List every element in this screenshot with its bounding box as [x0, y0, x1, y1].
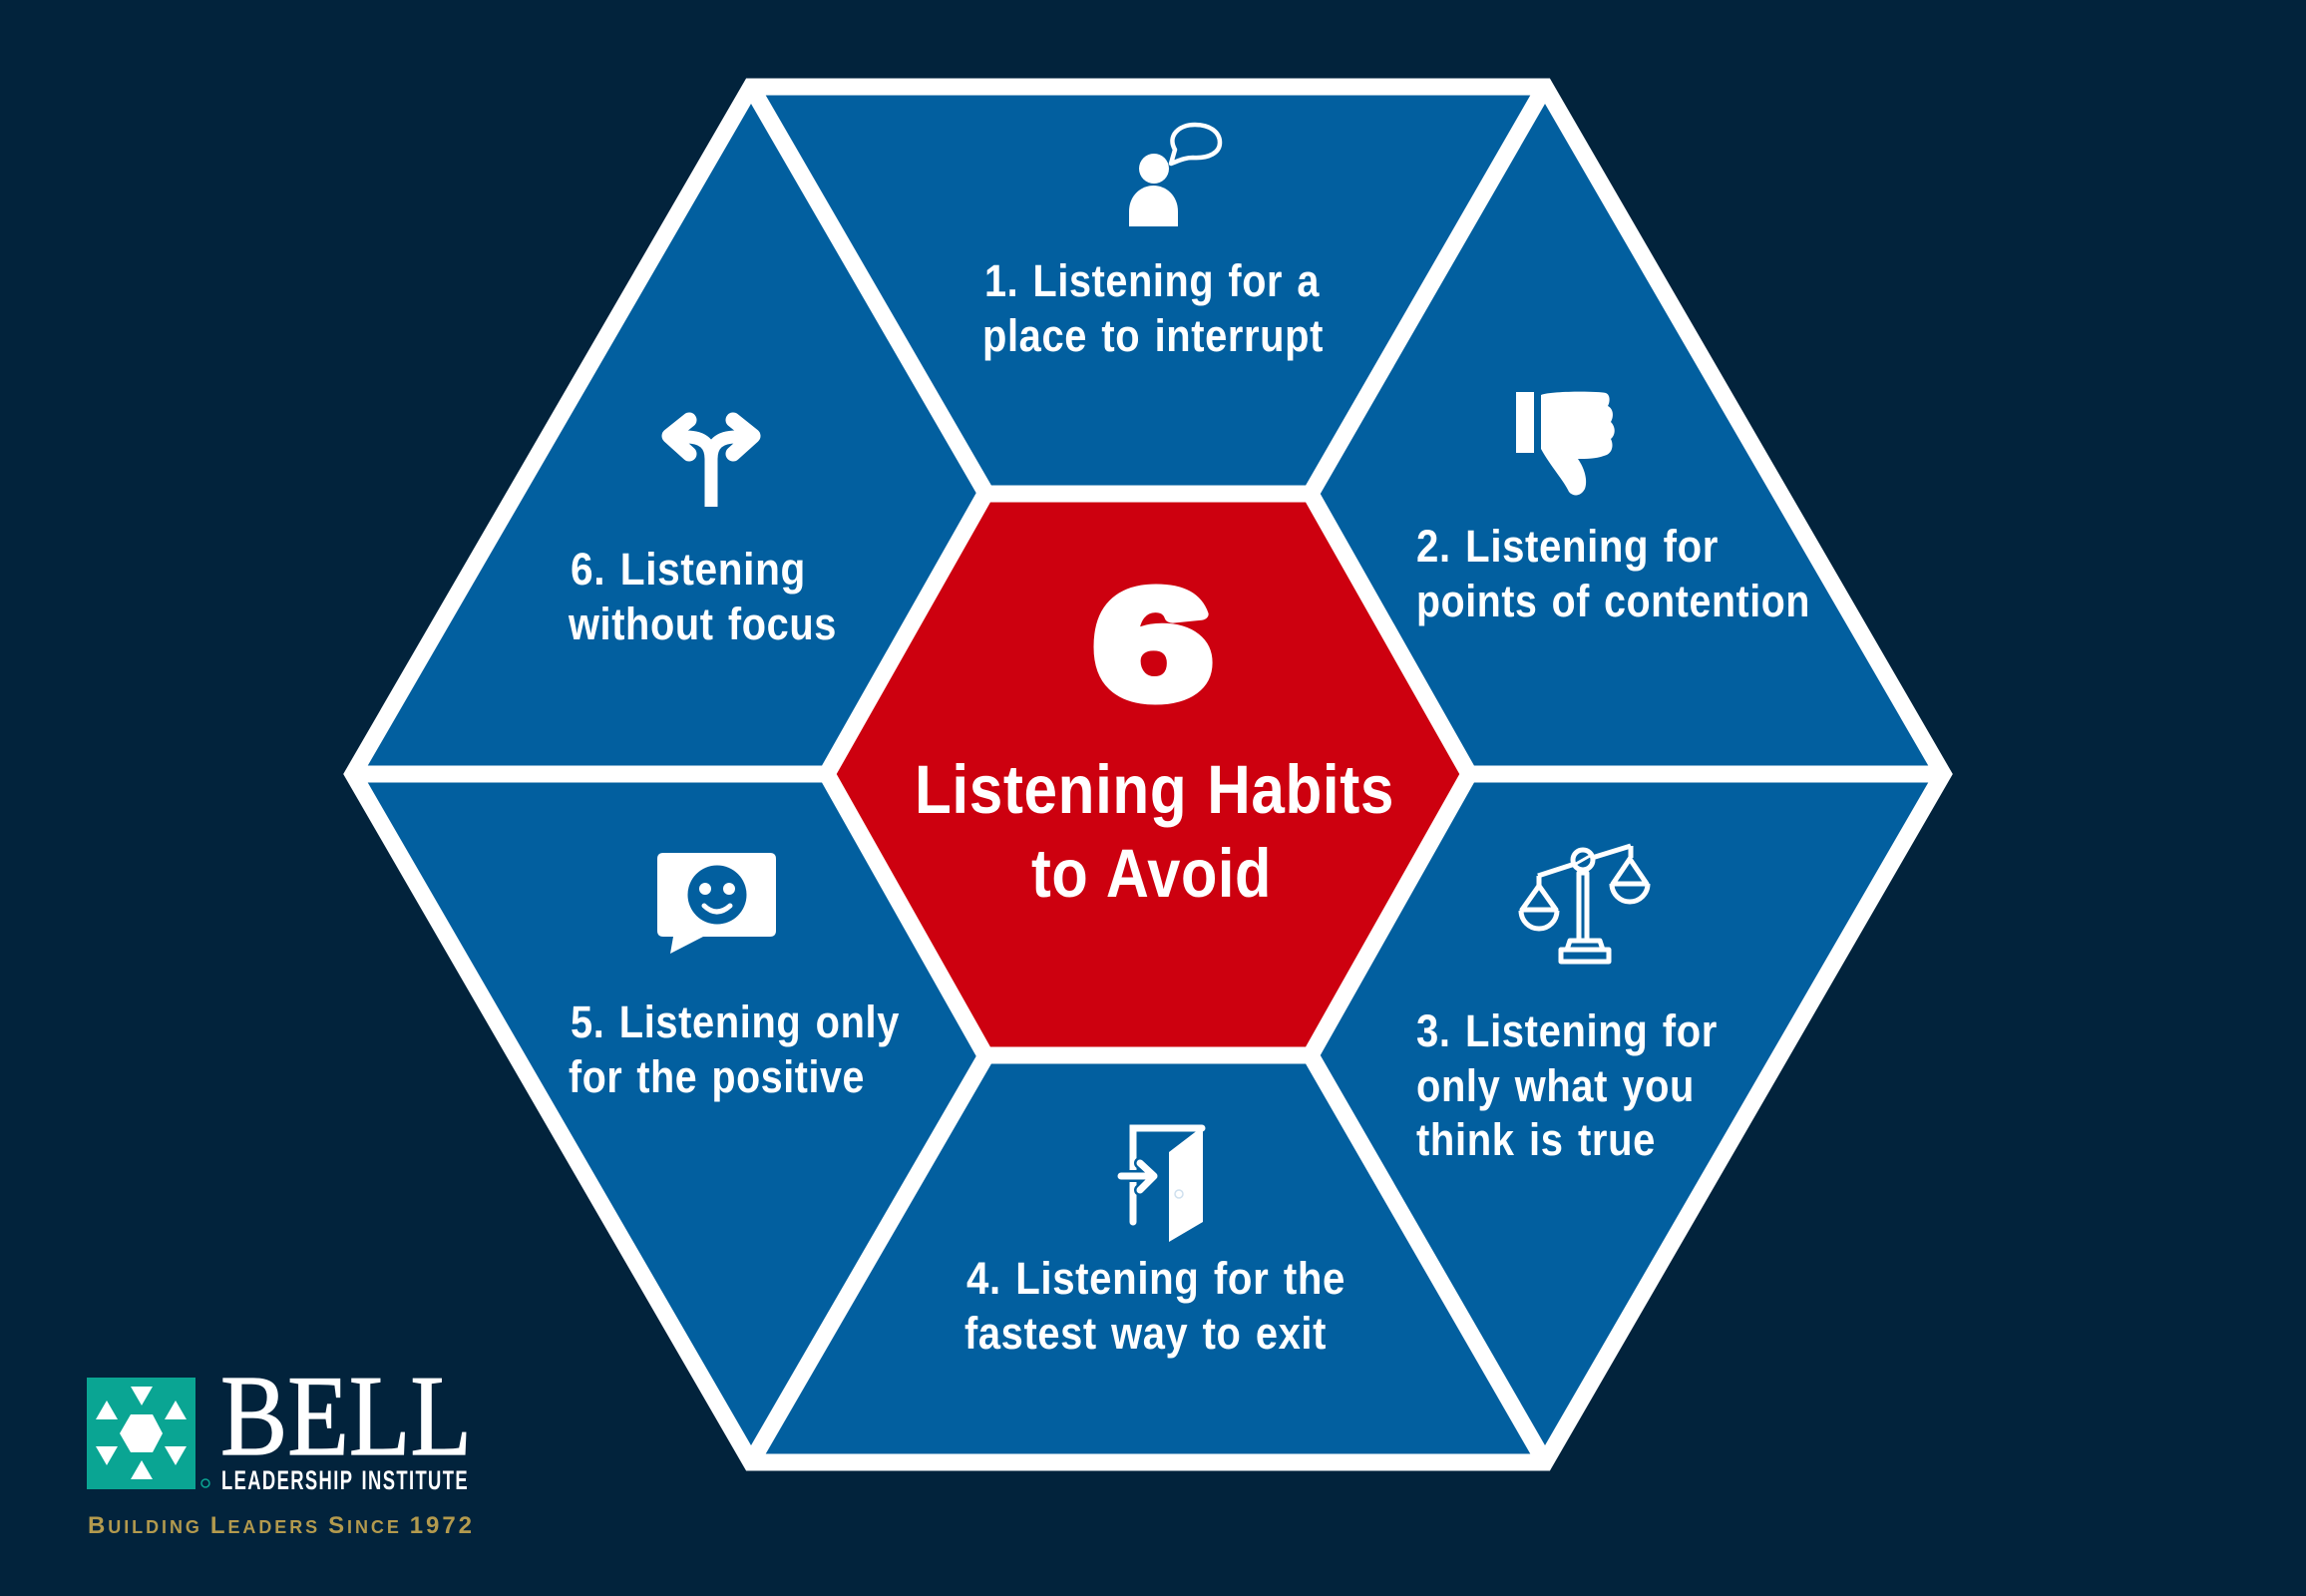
- text: habit 1: 1. Listening for a: [984, 255, 1320, 306]
- icon: door with arrow: [1119, 1126, 1203, 1242]
- text: habit 3: [1416, 1005, 1718, 1165]
- text: BELL: BELL: [220, 1353, 472, 1480]
- heading: Listening Habits to Avoid: [915, 751, 1394, 912]
- icon: teal logo mark: [87, 1378, 209, 1489]
- icon: smiley speech bubble: [657, 853, 776, 954]
- heading: Listening Habits to Avoid: to Avoid: [1031, 835, 1272, 912]
- text: habit 4: fastest way to exit: [964, 1308, 1327, 1359]
- text: habit 5: 5. Listening only: [571, 997, 900, 1047]
- panel 3: what you think is true: [1416, 846, 1718, 1165]
- panel 6: without focus: [568, 420, 837, 649]
- text: habit 6: without focus: [568, 598, 837, 649]
- text: habit 1: [982, 255, 1324, 361]
- panel: outer hexagon: [353, 87, 1943, 1462]
- panel: centre hexagon: [827, 494, 1469, 1055]
- text: habit 2: [1416, 521, 1810, 626]
- hexagon diagram: [353, 87, 1943, 1462]
- icon: scales: [1521, 846, 1648, 962]
- text: habit 6: [568, 544, 837, 649]
- text: habit 3: 3. Listening for: [1416, 1005, 1718, 1056]
- text: habit 2: 2. Listening for: [1416, 521, 1719, 572]
- panel 5: only the positive: [569, 853, 900, 1102]
- text: habit 4: 4. Listening for the: [966, 1253, 1345, 1304]
- panel 4: fastest way to exit: [964, 1126, 1345, 1359]
- panel 1: interrupt: [982, 125, 1324, 361]
- icon: thumbs down: [1516, 392, 1615, 495]
- icon: person with speech bubble: [1129, 125, 1220, 226]
- text: habit 5: [569, 997, 900, 1102]
- spokes: [353, 87, 1943, 1462]
- text: habit 1: place to interrupt: [982, 310, 1324, 361]
- panel 2: contention: [1416, 392, 1810, 626]
- text: habit 2: points of contention: [1416, 576, 1810, 626]
- text: Leadership Institute: LEADERSHIP INSTITUTE: [221, 1465, 469, 1495]
- icon: split arrows: [669, 420, 753, 507]
- text: tagline: BUILDING LEADERS SINCE 1972: [88, 1512, 472, 1539]
- text: habit 3: only what you: [1416, 1060, 1695, 1111]
- text: habit 6: 6. Listening: [571, 544, 806, 595]
- heading: big number 6: 6: [1094, 559, 1212, 730]
- text: habit 4: [964, 1253, 1345, 1359]
- text: habit 3: think is true: [1416, 1114, 1656, 1165]
- logo: Bell Leadership Institute: [87, 1353, 472, 1539]
- heading: Listening Habits to Avoid: Listening Habits: [915, 751, 1394, 828]
- text: habit 5: for the positive: [569, 1051, 865, 1102]
